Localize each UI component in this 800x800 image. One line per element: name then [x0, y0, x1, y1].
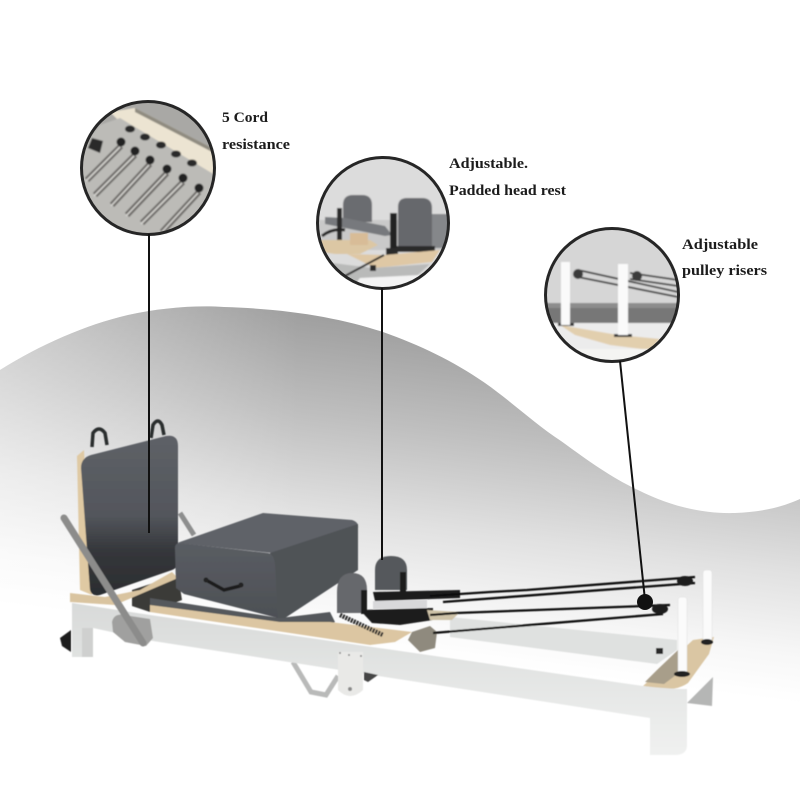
- box: front face: [175, 543, 278, 618]
- callout: adjustable pulley risers: [545, 228, 767, 363]
- end wood plate: [643, 637, 714, 689]
- pointer dot: [637, 594, 653, 610]
- label: Adjustable pulley risers: pulley risers: [682, 263, 767, 279]
- stand foot under rail: [293, 662, 338, 695]
- bracket bolts: [339, 652, 362, 691]
- label: Adjustable. Padded head rest: Padded head rest: [449, 183, 566, 199]
- wood carriage strip: [150, 605, 412, 645]
- front riser post: [678, 597, 687, 674]
- front head rest: [337, 573, 367, 613]
- background wave: [0, 306, 800, 800]
- bracket dark spring: [364, 672, 378, 682]
- box handle: [204, 578, 244, 590]
- head rest posts: [361, 572, 406, 614]
- label: Adjustable. Padded head rest: [449, 156, 566, 199]
- post bases: [674, 639, 713, 677]
- pointer line: pulley risers: [620, 361, 645, 600]
- coiled spring: [340, 615, 383, 635]
- box: side face: [270, 524, 358, 618]
- side arm: [64, 518, 143, 643]
- callout: 5 cord resistance: [80, 100, 290, 236]
- left wood seat plate: [70, 572, 178, 605]
- label: Adjustable pulley risers: Adjustable: [682, 237, 758, 253]
- centre bracket: [338, 652, 363, 696]
- box: top face: [177, 513, 358, 553]
- right end bracket: [687, 677, 713, 706]
- label: Adjustable. Padded head rest: Adjustable.: [449, 156, 528, 172]
- far rail: [450, 617, 677, 664]
- riser post back: [703, 570, 712, 642]
- pointer line: cord resistance: [148, 234, 150, 533]
- label: 5 Cord resistance: resistance: [222, 137, 290, 153]
- ropes: [430, 577, 695, 633]
- reformer machine: [60, 421, 714, 755]
- back rest support arm: [180, 513, 194, 535]
- back rest pad: [81, 436, 178, 595]
- pulleys: [652, 576, 693, 614]
- left foot: [60, 630, 71, 652]
- hinge plate: [112, 615, 153, 646]
- stop knob: [656, 648, 663, 654]
- wooden back board: [77, 450, 92, 595]
- back rest handles: [92, 421, 164, 447]
- label: 5 Cord resistance: 5 Cord: [222, 110, 269, 126]
- label: Adjustable pulley risers: [682, 237, 767, 279]
- callout: padded head rest: [315, 155, 566, 291]
- black straps: [360, 590, 460, 625]
- mechanism behind carriage: [132, 575, 182, 612]
- magnifier circle: head rests: [315, 155, 451, 291]
- carriage dark plate: [150, 598, 335, 630]
- inner leg shade: [82, 628, 93, 657]
- end plate inset: [645, 650, 680, 684]
- pointer line: head rest: [381, 288, 383, 560]
- magnifier circle: cord knobs: [80, 100, 220, 236]
- near rail and legs: [72, 603, 687, 755]
- magnifier circle: pulley risers: [545, 228, 679, 363]
- back head rest: [375, 556, 407, 590]
- label: 5 Cord resistance: [222, 110, 290, 153]
- carriage mechanism: [408, 610, 460, 652]
